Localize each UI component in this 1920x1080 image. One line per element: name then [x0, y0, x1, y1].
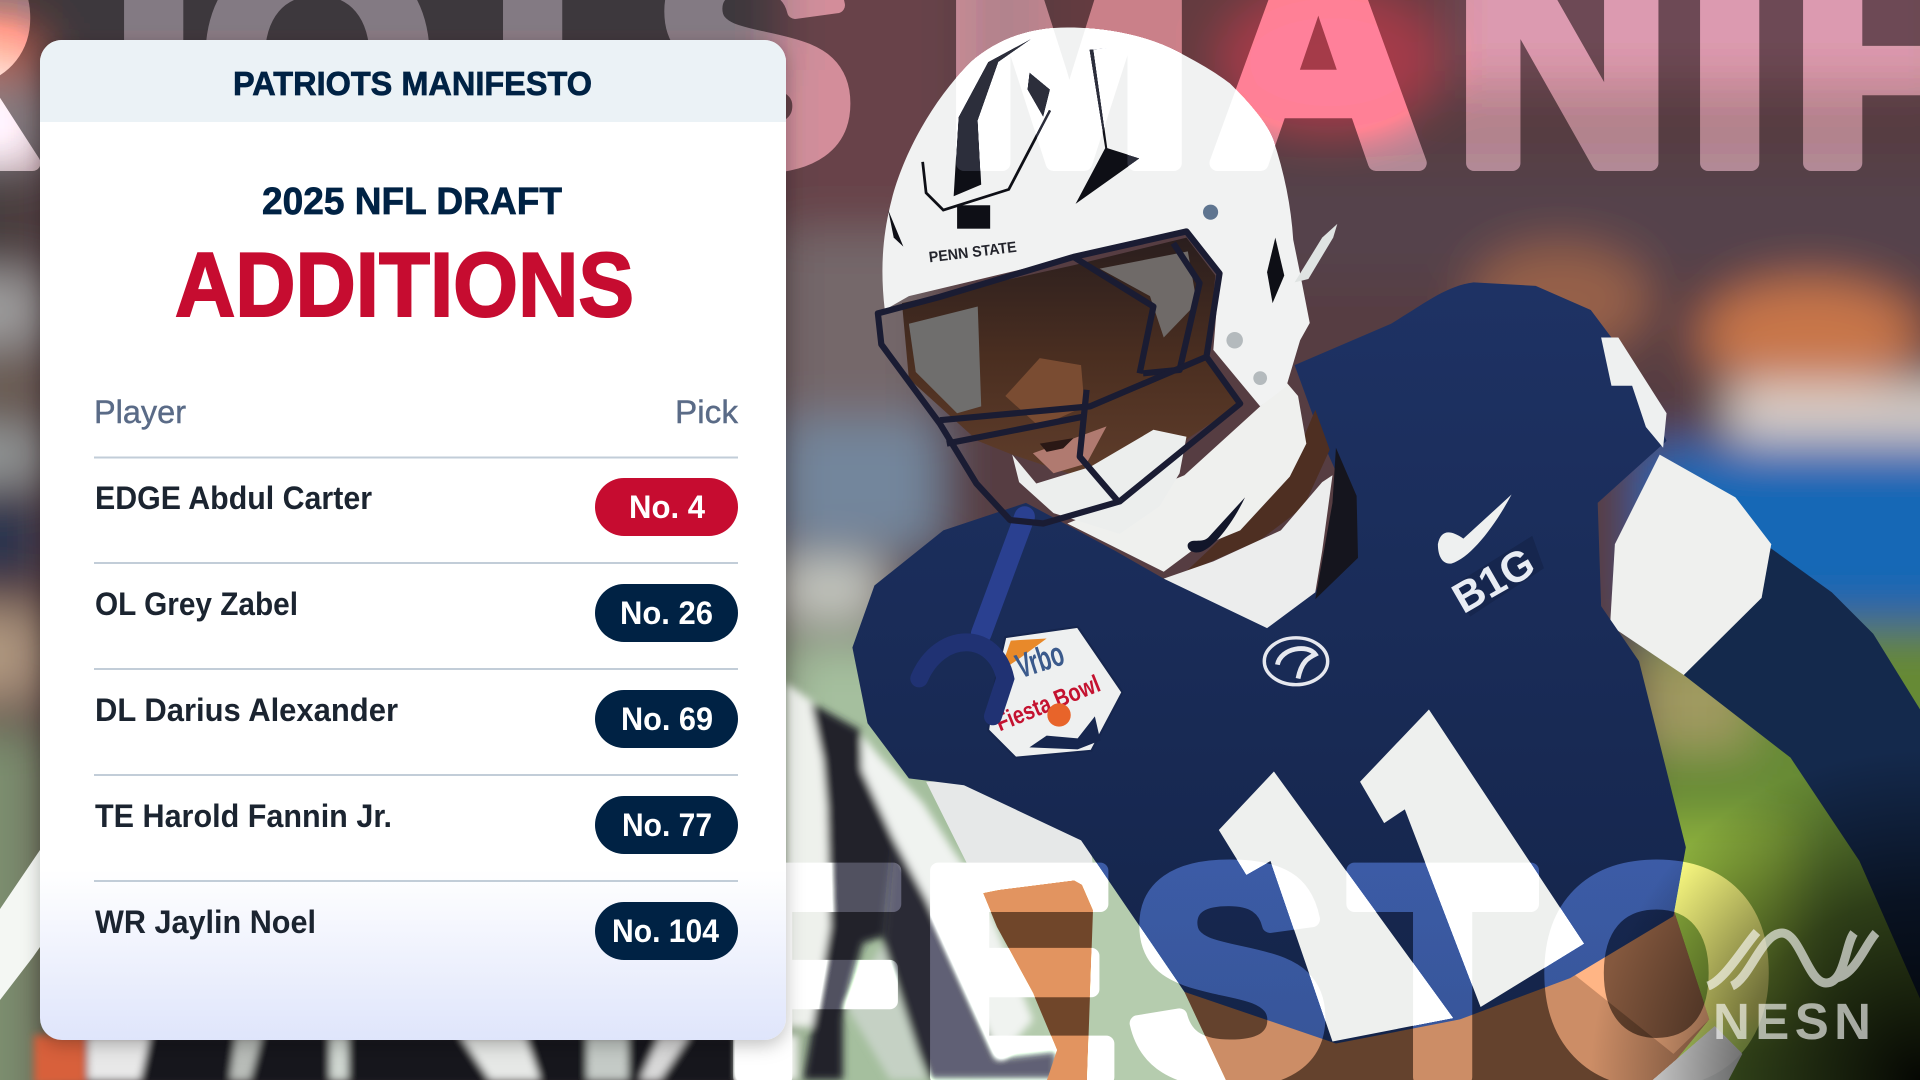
oversized background wordmark, bottom	[0, 805, 1773, 1080]
row: Darius Alexander	[95, 690, 738, 748]
row: Harold Fannin Jr.: TE Harold Fannin Jr.	[95, 798, 392, 834]
column header: player: Player	[94, 394, 186, 430]
row: Jaylin Noel: No. 104	[612, 913, 719, 949]
NESN logo	[1708, 932, 1876, 1050]
penn state logo	[1264, 638, 1328, 685]
row: Abdul Carter: No. 4	[629, 489, 705, 525]
subheading: 2025 NFL DRAFT	[262, 181, 562, 223]
helmet graphics	[888, 38, 1284, 303]
panel header band	[40, 40, 786, 122]
row: Jaylin Noel	[95, 902, 738, 960]
helmet brand text: PENN STATE	[928, 239, 1018, 266]
facemask	[878, 231, 1240, 523]
bottom-left strip under the panel	[34, 1035, 798, 1080]
logo wordmark: NESN	[1713, 993, 1871, 1050]
row: Abdul Carter	[95, 478, 738, 536]
referee in the foreground	[786, 683, 1057, 1080]
helmet chin strap tab	[1295, 224, 1337, 282]
nike swoosh	[1438, 495, 1512, 564]
corner vignette	[1500, 700, 1920, 1080]
neck skin	[1184, 410, 1330, 573]
helmet bolts	[1203, 205, 1267, 385]
row: Harold Fannin Jr.	[95, 796, 738, 854]
Fiesta Bowl patch: Fiesta Bowl	[992, 671, 1104, 737]
column header: pick: Pick	[675, 394, 739, 430]
row: Jaylin Noel: WR Jaylin Noel	[95, 904, 316, 940]
white undersleeve on left arm	[926, 780, 1096, 893]
Fiesta Bowl patch	[988, 627, 1122, 758]
main title: ADDITIONS	[175, 235, 634, 336]
waistband	[1653, 1026, 1742, 1080]
row: Darius Alexander: DL Darius Alexander	[95, 692, 398, 728]
chin cup	[1012, 430, 1186, 534]
lower torso skin	[1184, 909, 1709, 1080]
dark compression arm sleeve	[1684, 548, 1920, 999]
Big Ten patch: B1G	[1444, 538, 1543, 623]
panel background	[40, 40, 786, 1040]
row: Darius Alexander: No. 69	[621, 701, 713, 737]
neck roll swoosh	[1188, 497, 1245, 552]
white undersleeve on right arm	[1610, 455, 1771, 675]
face and visor	[902, 238, 1240, 475]
mouthguard and strap	[919, 517, 1025, 716]
forearm	[983, 880, 1093, 1080]
neck roll	[1067, 382, 1306, 572]
row: Grey Zabel	[95, 584, 738, 642]
dark collar strip	[1315, 448, 1358, 599]
row: Harold Fannin Jr.: No. 77	[622, 807, 712, 843]
logo wave mark	[1708, 932, 1876, 986]
jersey number 11	[1219, 709, 1584, 1041]
row: Grey Zabel: No. 26	[620, 595, 713, 631]
panel: draft additions	[40, 40, 786, 1040]
white undershirt collar	[1164, 475, 1332, 628]
jersey shoulder number	[1601, 338, 1667, 448]
player	[852, 27, 1920, 1080]
row: Abdul Carter: EDGE Abdul Carter	[95, 480, 372, 516]
faint MANIFESTO letter on far left edge	[0, 850, 40, 1000]
jersey	[852, 282, 1686, 1044]
helmet shell	[882, 27, 1310, 406]
Fiesta Bowl patch: Vrbo	[1011, 635, 1069, 686]
row: Grey Zabel: OL Grey Zabel	[95, 586, 298, 622]
brand heading: PATRIOTS MANIFESTO	[233, 65, 592, 102]
